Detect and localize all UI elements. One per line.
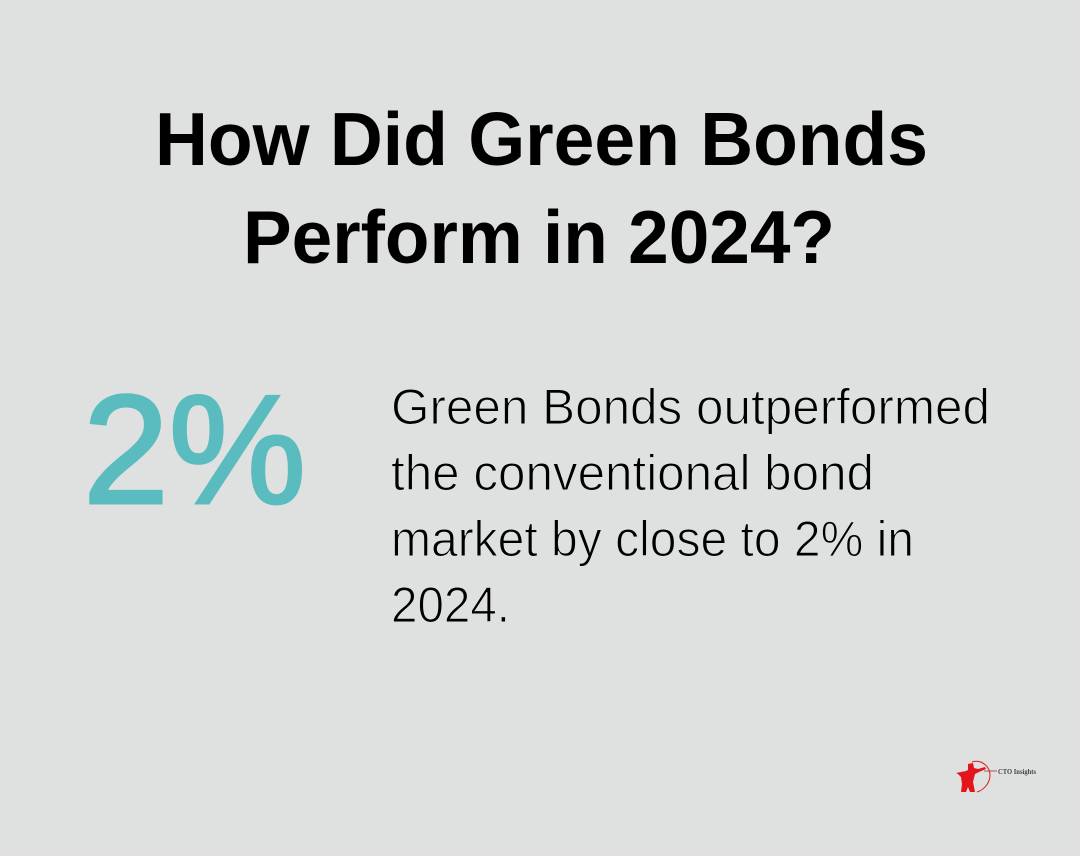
logo: red archer with CTO Insights label — [956, 761, 1036, 792]
icon: archer figure — [956, 763, 986, 792]
title — [155, 97, 928, 279]
logo text: CTO Insights — [998, 768, 1036, 776]
big stat: 2%: 2% — [83, 363, 306, 536]
description text: 2024. — [391, 577, 510, 633]
description text — [391, 379, 990, 633]
description text: market by close to 2% in — [391, 511, 914, 567]
title: How Did Green Bonds — [155, 97, 928, 181]
description text: Green Bonds outperformed — [391, 379, 990, 435]
description text: the conventional bond — [391, 445, 874, 501]
icon: bow — [972, 761, 990, 792]
title: Perform in 2024? — [243, 195, 835, 279]
icon: arrow — [984, 770, 997, 772]
